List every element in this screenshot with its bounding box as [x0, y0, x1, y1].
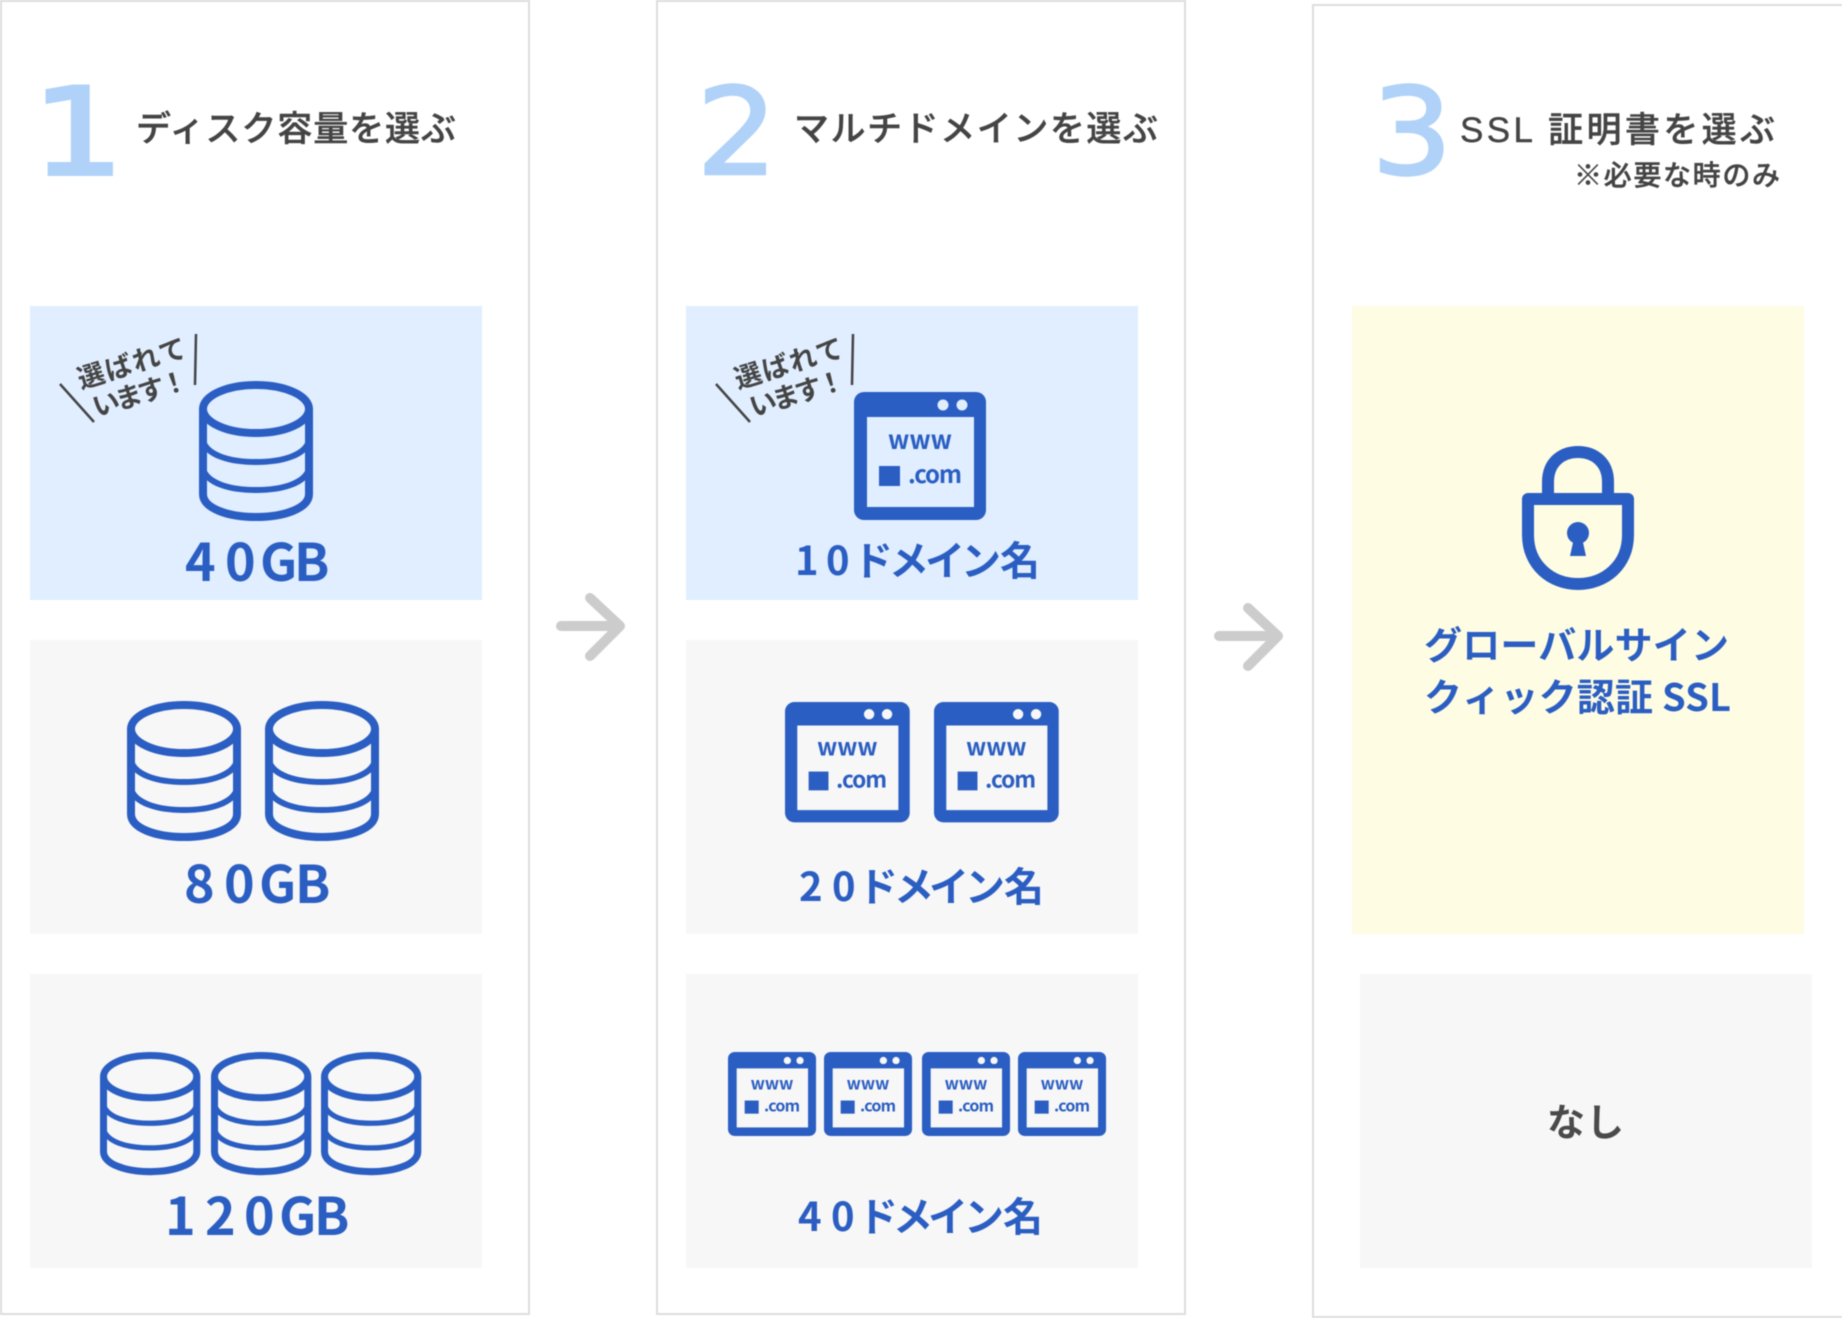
arrow: step 1 to 2 — [561, 598, 620, 656]
icon: browser window: .com — [764, 1094, 800, 1117]
label: quick SSL: クィック認証 SSL — [1424, 667, 1731, 722]
panel: step 3 SSL certificate — [1313, 5, 1842, 1317]
heading: step 2: マルチドメインを選ぶ — [794, 110, 1158, 149]
icon: browser window: www — [1041, 1070, 1084, 1094]
badge: popular: います！ — [744, 359, 849, 425]
icon: browser window: www — [966, 729, 1027, 764]
icon: browser window — [728, 1052, 816, 1136]
option: 40 domains — [686, 974, 1138, 1268]
icon: browser window: .com — [860, 1094, 896, 1117]
heading: step 1: ディスク容量を選ぶ — [136, 110, 456, 149]
label: 40 domains: 40ドメイン名 — [798, 1185, 1043, 1243]
icon: database — [104, 1056, 197, 1172]
icon: browser window: www — [945, 1070, 988, 1094]
option: 120GB — [30, 974, 482, 1268]
option: 10 domains — [686, 306, 1138, 600]
icon: browser window: www — [888, 420, 952, 457]
label: 10 domains: 10ドメイン名 — [795, 529, 1040, 587]
step number 2: 2 — [697, 63, 777, 203]
icon: browser window: .com — [985, 762, 1036, 795]
icon: database — [215, 1056, 308, 1172]
icon: database — [203, 385, 309, 517]
panel: step 2 multi domain — [657, 1, 1185, 1314]
icon: browser window — [785, 702, 910, 822]
icon: browser window — [922, 1052, 1010, 1136]
step number 1: 1 — [32, 64, 124, 203]
option: 20 domains — [686, 640, 1138, 934]
badge: popular — [60, 327, 196, 425]
option: GlobalSign quick SSL — [1352, 306, 1804, 934]
label: 80GB: 80GB — [184, 843, 330, 918]
icon: browser window: www — [817, 729, 878, 764]
icon: browser window: www — [847, 1070, 890, 1094]
label: 40GB: 40GB — [185, 521, 329, 596]
label: none: なし — [1547, 1103, 1624, 1145]
icon: browser window: .com — [908, 455, 962, 490]
icon: browser window — [824, 1052, 912, 1136]
badge: popular: 選ばれて — [729, 327, 847, 397]
icon: browser window: .com — [836, 762, 887, 795]
step number 3: 3 — [1372, 63, 1452, 203]
icon: database — [325, 1056, 418, 1172]
heading: step 3: SSL 証明書を選ぶ — [1460, 111, 1775, 150]
label: GlobalSign: グローバルサイン — [1424, 615, 1729, 670]
icon: browser window — [1018, 1052, 1106, 1136]
option: 40GB — [30, 306, 482, 600]
icon: browser window: www — [751, 1070, 794, 1094]
icon: browser window: .com — [958, 1094, 994, 1117]
note: only when needed: ※必要な時のみ — [1574, 160, 1780, 191]
arrow: step 2 to 3 — [1219, 608, 1278, 666]
icon: browser window: .com — [1054, 1094, 1090, 1117]
panel: step 1 disk capacity — [1, 1, 529, 1314]
badge: popular — [716, 327, 853, 425]
badge: popular: います！ — [87, 359, 192, 425]
option: 80GB — [30, 640, 482, 934]
icon: browser window — [934, 702, 1059, 822]
icon: browser window — [854, 392, 986, 520]
icon: padlock — [1528, 452, 1628, 584]
icon: database — [131, 705, 237, 837]
label: 20 domains: 20ドメイン名 — [799, 855, 1044, 913]
option: none — [1360, 974, 1812, 1268]
label: 120GB: 120GB — [165, 1175, 349, 1250]
badge: popular: 選ばれて — [72, 327, 190, 397]
icon: database — [269, 705, 375, 837]
